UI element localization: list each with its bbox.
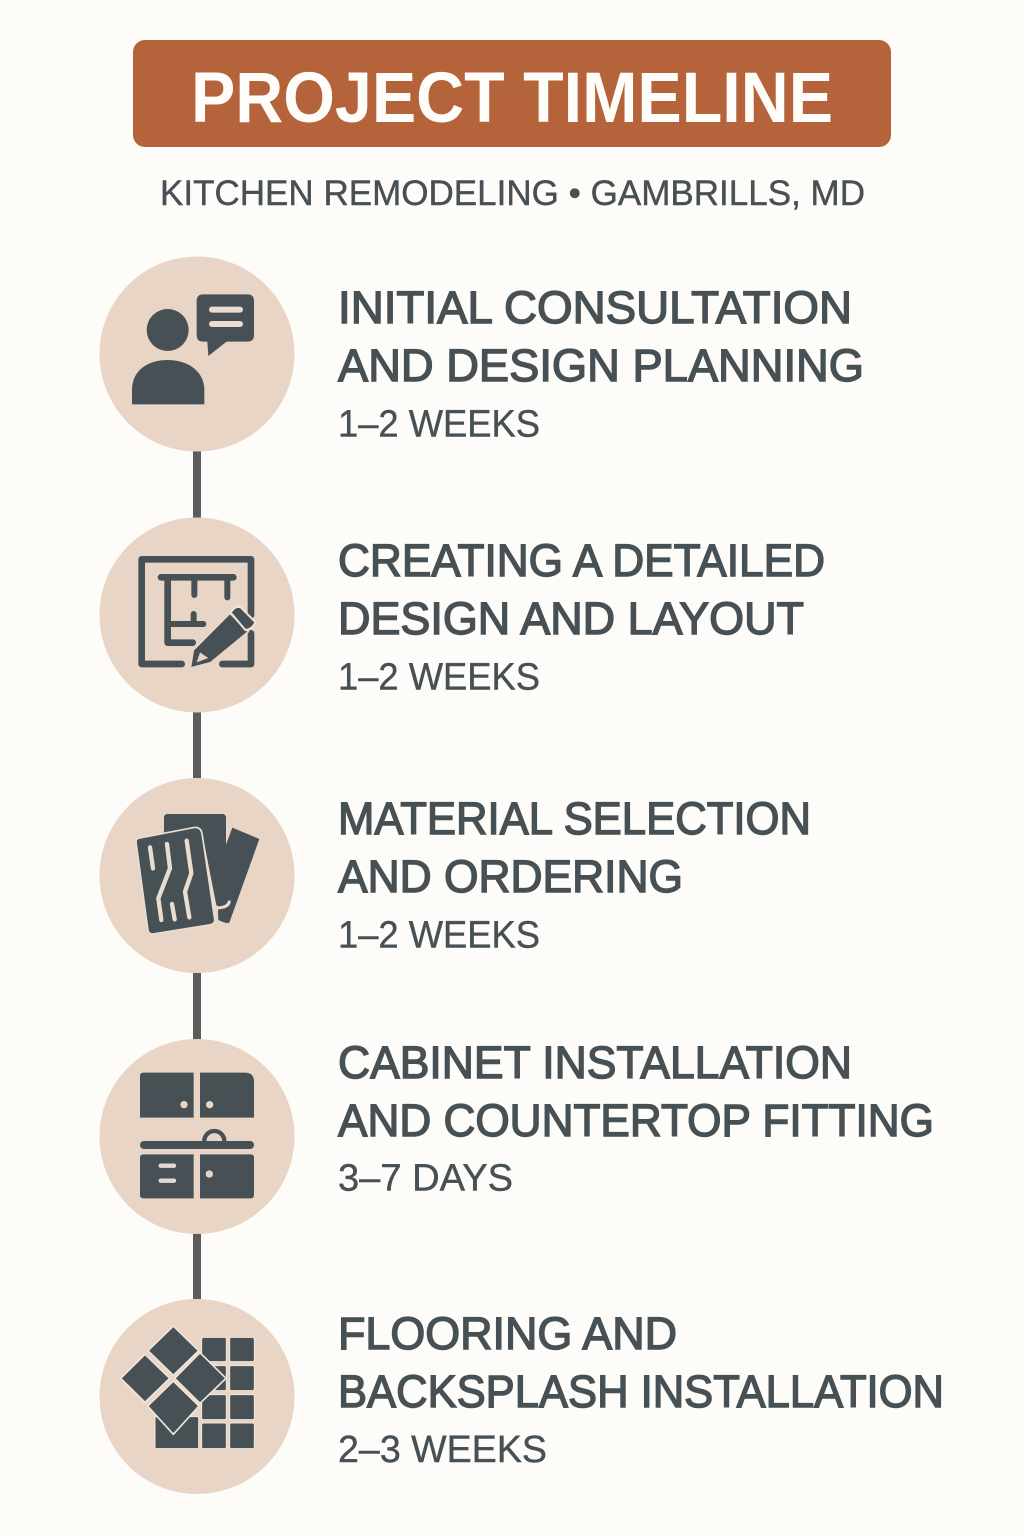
step 4 marker: cabinets icon xyxy=(100,1039,294,1234)
step 4 text: AND COUNTERTOP FITTING xyxy=(338,1095,934,1146)
step 3 text: AND ORDERING xyxy=(338,851,683,902)
step 5 text: 2–3 WEEKS xyxy=(338,1429,547,1471)
subtitle: KITCHEN REMODELING • GAMBRILLS, MD xyxy=(160,174,865,213)
step 4 text xyxy=(338,1037,934,1200)
step 3 text xyxy=(338,793,811,956)
step 1 text: INITIAL CONSULTATION xyxy=(338,282,852,333)
title banner: PROJECT TIMELINE xyxy=(191,59,833,138)
step 2 marker: floor plan icon xyxy=(100,518,294,712)
step 4 text: 3–7 DAYS xyxy=(338,1158,513,1200)
step 5 marker: tiles icon xyxy=(100,1299,294,1494)
step 1 text xyxy=(338,282,864,446)
step 2 text: 1–2 WEEKS xyxy=(338,656,540,698)
step 3 text: MATERIAL SELECTION xyxy=(338,793,811,844)
step 5 text: FLOORING AND xyxy=(338,1308,677,1359)
step 1 text: 1–2 WEEKS xyxy=(338,404,540,446)
step 2 text: CREATING A DETAILED xyxy=(338,535,825,586)
step 5 text xyxy=(338,1308,944,1471)
step 2 text: DESIGN AND LAYOUT xyxy=(338,593,804,644)
step 5 text: BACKSPLASH INSTALLATION xyxy=(338,1366,944,1417)
timeline connectors xyxy=(193,450,201,1300)
step 3 marker: material samples icon xyxy=(100,778,294,973)
step 3 text: 1–2 WEEKS xyxy=(338,914,540,956)
step 1 marker: consultation icon xyxy=(100,256,294,452)
step 4 text: CABINET INSTALLATION xyxy=(338,1037,852,1088)
step 2 text xyxy=(338,535,825,698)
step 1 text: AND DESIGN PLANNING xyxy=(338,340,864,391)
title banner xyxy=(133,40,891,147)
